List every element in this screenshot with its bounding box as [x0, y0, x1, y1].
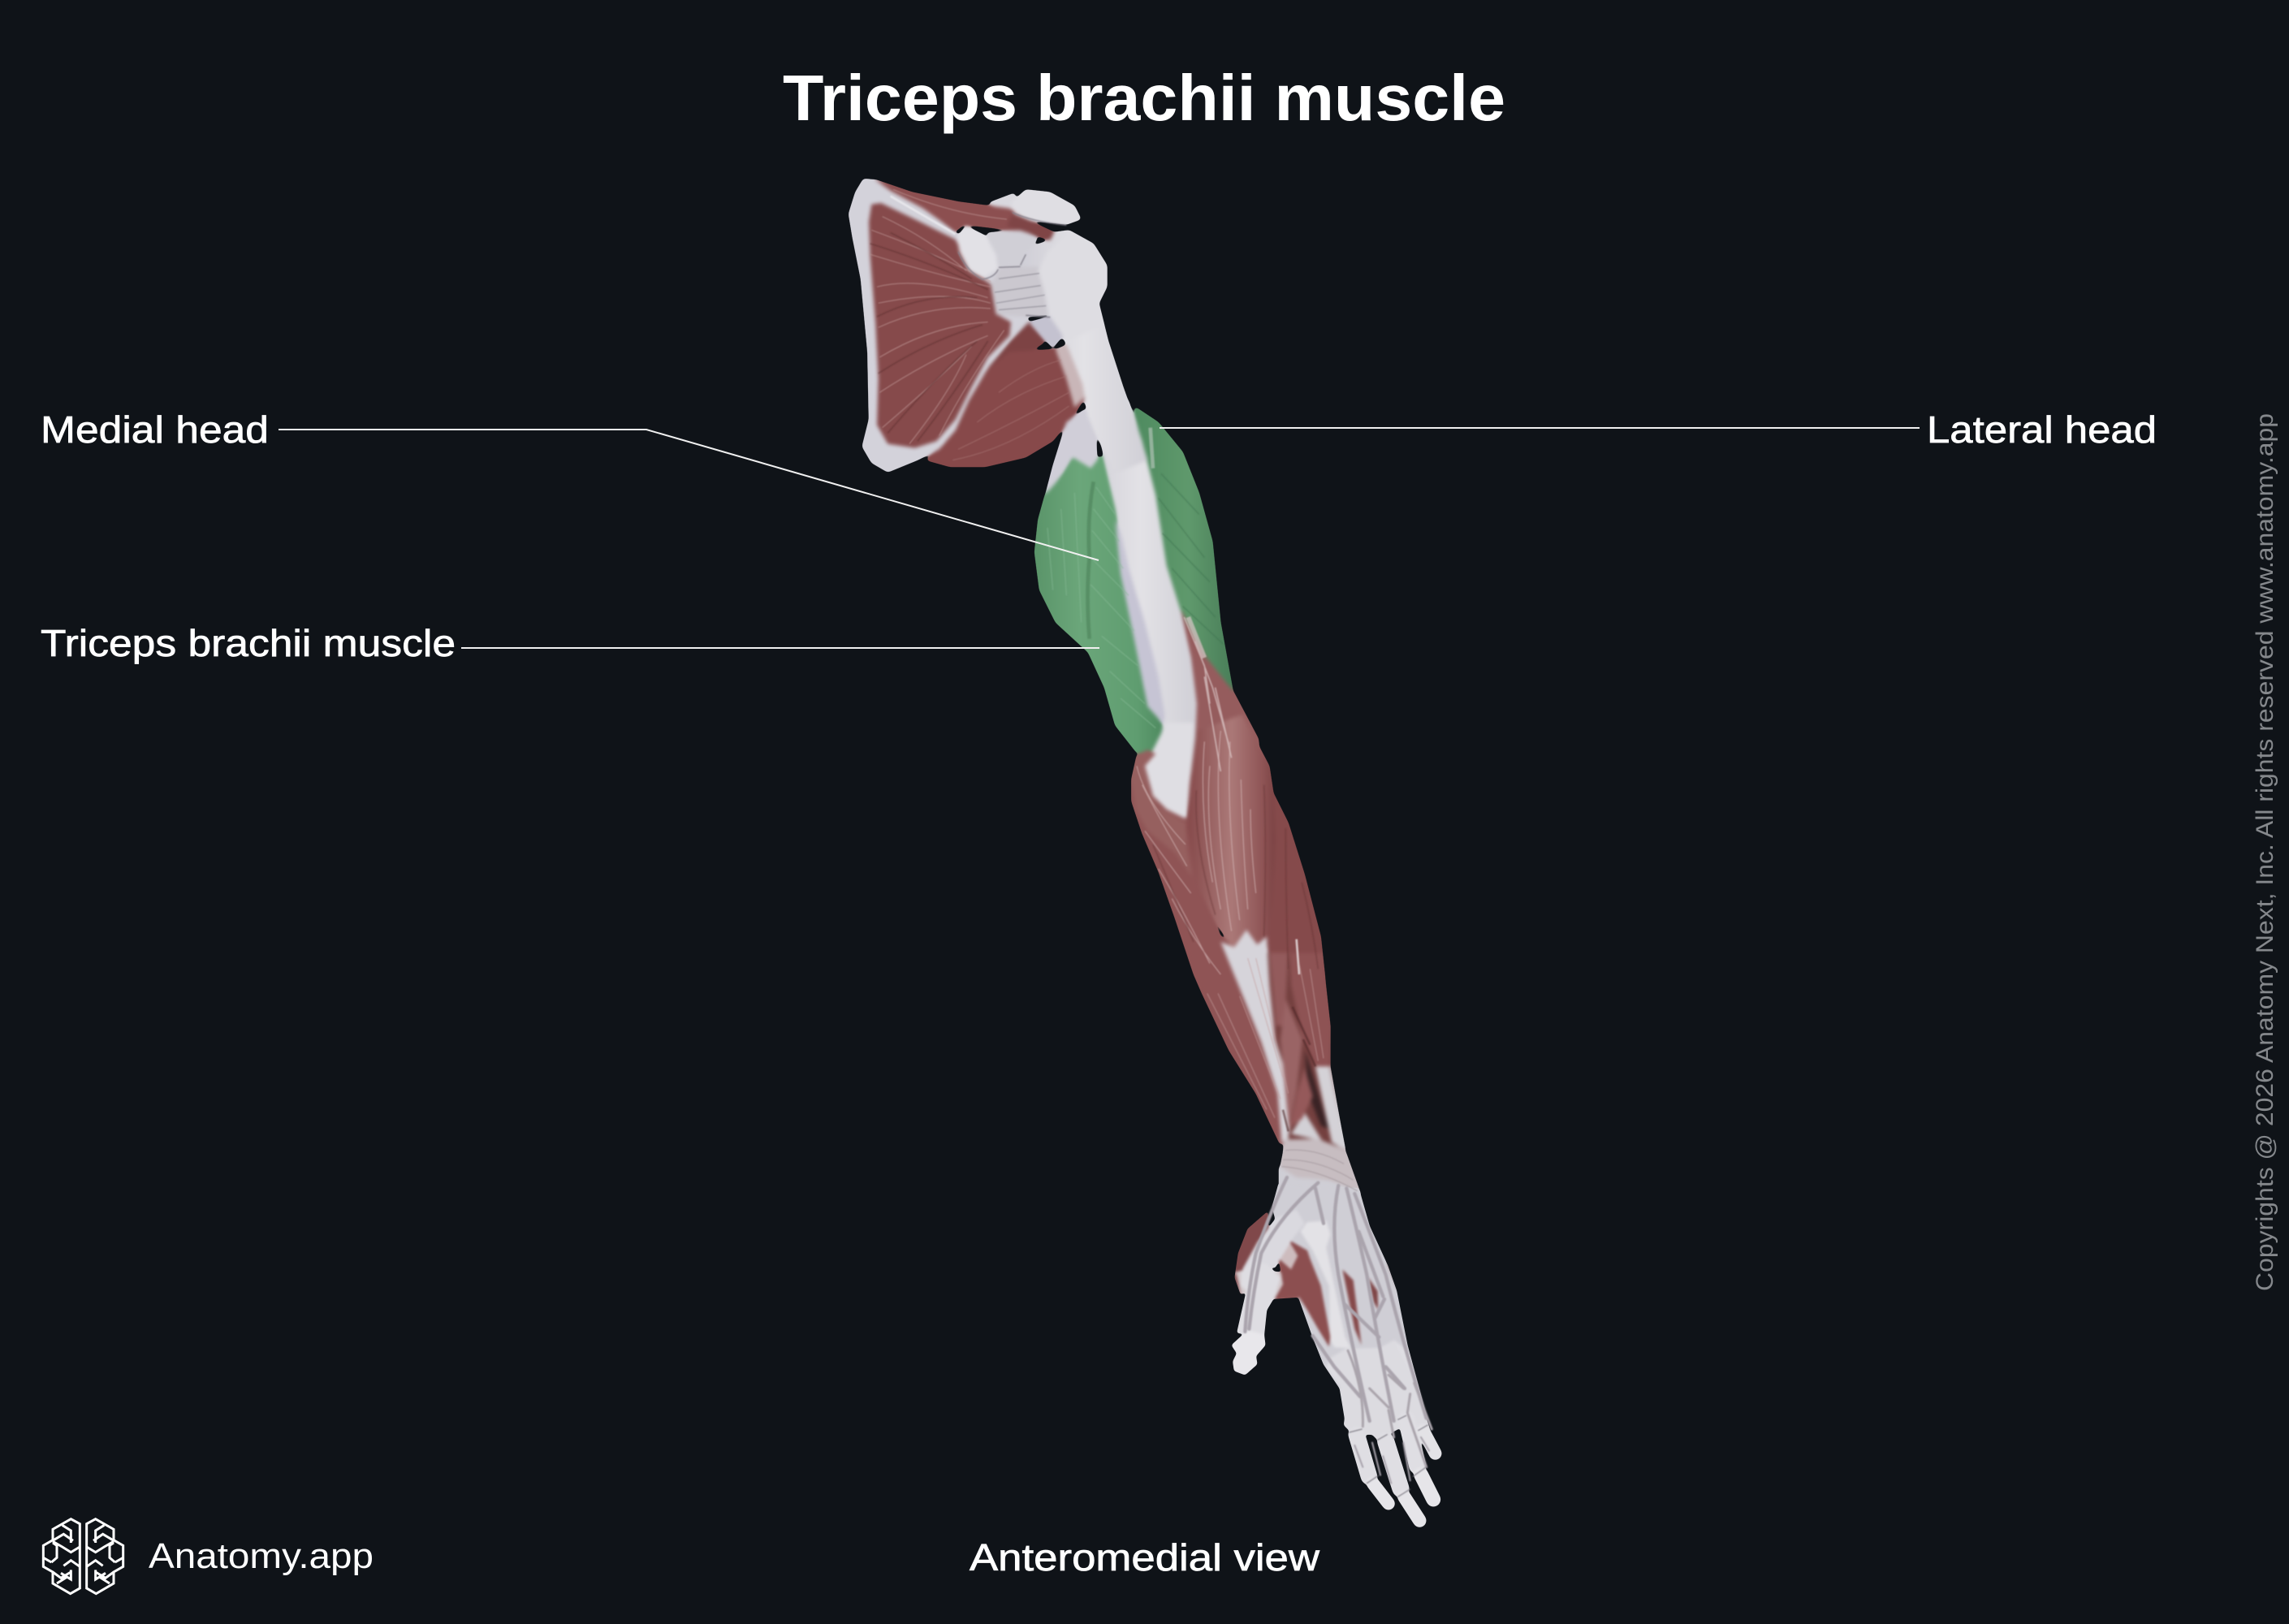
distal forearm tendons and fibres — [1207, 958, 1358, 1191]
triceps and humerus — [1034, 400, 1233, 774]
triceps fibres — [1047, 428, 1232, 771]
upper forearm muscle origin — [1181, 609, 1261, 774]
logo icon: brain — [43, 1519, 123, 1594]
distal forearm — [1220, 930, 1362, 1202]
hand tendons — [1245, 1177, 1427, 1421]
caption: view: Anteromedial view — [970, 1536, 1320, 1579]
scapula muscle fibres — [870, 189, 1069, 460]
finger tendons and joints — [1348, 1350, 1432, 1497]
title: Triceps brachii muscle — [783, 62, 1505, 134]
forearm wide shading — [1199, 753, 1281, 948]
forearm — [1131, 715, 1329, 1145]
shoulder muscles behind scapula — [926, 322, 1086, 467]
surface detail: fibres and tendons — [870, 189, 1432, 1497]
shoulder, arm and forearm base shapes — [849, 179, 1362, 1202]
forearm fibres — [1137, 731, 1318, 974]
label: triceps brachii muscle: Triceps brachii muscle — [41, 622, 456, 664]
leader line: lateral head — [1160, 427, 1920, 429]
palm and thumb — [1232, 1183, 1427, 1421]
hand base shapes — [1232, 1183, 1436, 1521]
anatomical illustration: arm — [849, 179, 1436, 1521]
leader line: medial head — [279, 430, 1099, 560]
copyright: Copyrights @ 2026 Anatomy Next, Inc. All rights reserved www.anatomy.app — [2252, 413, 2278, 1291]
scapula and humeral head — [849, 179, 1147, 473]
logo wordmark: Anatomy.app — [149, 1536, 374, 1576]
label: medial head: Medial head — [41, 408, 269, 451]
label: lateral head: Lateral head — [1927, 408, 2157, 451]
leader line: triceps brachii — [461, 647, 1099, 649]
fingers — [1329, 1340, 1436, 1521]
